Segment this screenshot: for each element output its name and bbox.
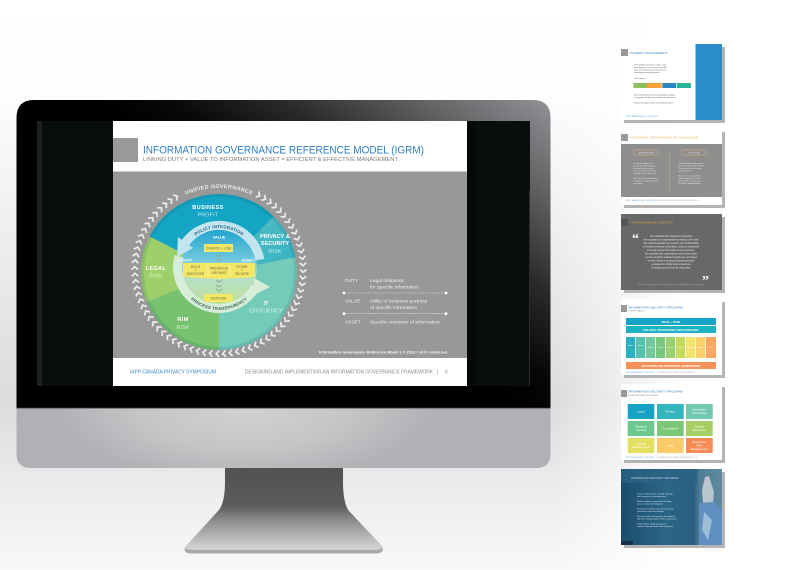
- thumbnail 5: program stakeholder grid: Physical: [636, 424, 647, 428]
- definition: value: of specific information: [370, 305, 418, 311]
- thumbnail 5: program stakeholder grid: DESIGNING AND IMPLEMENTING A FRAMEWORK | 8: [657, 456, 697, 459]
- thumbnail 1: incident management: INCIDENT MANAGEMENT: [630, 51, 668, 55]
- thumbnail 4: security program diagram: Comms: [648, 347, 653, 349]
- definition: value: [345, 298, 428, 311]
- thumbnail 5: program stakeholder grid: INFORMATION SECURITY PROGRAM: [628, 390, 684, 394]
- thumbnail 1: incident management: to respond to improve incident performance: [634, 96, 677, 99]
- thumbnail 5: program stakeholder grid: Privacy: [666, 410, 676, 414]
- box: hold, preserve, store: ARCHIVE: [211, 271, 227, 275]
- thumbnail 6: photo slide: Develop familiarity with latest security: [637, 508, 674, 510]
- thumbnail 1: incident management: Five stages:: [634, 77, 646, 80]
- thumbnail 5: program stakeholder grid: Resources: [692, 428, 707, 432]
- thumbnail 3: quotation: to foreign-based third party service providers.: [647, 249, 695, 252]
- thumbnail 1: incident management: [621, 44, 725, 123]
- definition: duty: [345, 278, 419, 290]
- monitor stand: [184, 466, 383, 554]
- footer right: |: [437, 370, 438, 376]
- thumbnail 2: outsourcing vs cloud: THE CLOUD: [688, 152, 700, 154]
- slide header marker: [113, 138, 138, 162]
- thumbnail 2: outsourcing vs cloud: its own processing plus: [633, 164, 657, 168]
- box: hold, preserve, store: HOLD: [191, 265, 201, 269]
- thumbnail 3: quotation: “: [632, 232, 639, 247]
- thumbnail 5: program stakeholder grid: Enterprise: [693, 440, 706, 444]
- thumbnail 3: quotation: is being processed by the third party.: [652, 266, 691, 270]
- thumbnail 2: outsourcing vs cloud: Client Shared usage only: [678, 162, 703, 165]
- thumbnail 2: outsourcing vs cloud: service where they have: [633, 170, 657, 172]
- lifecycle boxes: [183, 244, 255, 302]
- thumbnail 5: program stakeholder grid: Management: [691, 447, 708, 451]
- thumbnail 3: quotation: It is essential that organizations subscribed under: [645, 252, 697, 256]
- footer right: 6: [445, 370, 448, 376]
- box: hold, preserve, store: PRESERVE: [210, 266, 229, 270]
- thumbnail 5: program stakeholder grid: IAPP CANADA PRIVACY SYMPOSIUM: [626, 456, 655, 459]
- sector: IT: [219, 257, 297, 350]
- definition: duty: for specific information: [370, 284, 419, 290]
- definition: value: Utility or business purpose: [370, 298, 428, 304]
- thumbnail 6: photo slide: with the strategic goals of the corporation: [637, 518, 678, 520]
- thumbnail 3: quotation: to what results in protected transparent land: [648, 260, 695, 262]
- box: dispose: DISPOSE: [211, 296, 227, 300]
- label: privacy and security risk: RISK: [268, 249, 282, 255]
- thumbnail 2: outsourcing vs cloud: OUTSOURCING: [638, 152, 654, 154]
- thumbnail 5: program stakeholder grid: Human: [695, 424, 704, 428]
- labels: value, duty, asset: [182, 236, 255, 262]
- thumbnail 5: program stakeholder grid: Management: [633, 445, 650, 449]
- label: RIM risk: RIM: [177, 317, 189, 323]
- thumbnail 5: program stakeholder grid: Compliance: [663, 426, 678, 430]
- labels: value, duty, asset: DUTY: [182, 258, 193, 262]
- slide title: INFORMATION GOVERNANCE REFERENCE MODEL (IGRM): [143, 144, 424, 156]
- thumbnail 6: photo slide: monitor internal audits and regulators: [637, 525, 674, 528]
- label: legal risk: RISK: [149, 274, 163, 280]
- thumbnail 1: incident management: data and information response to: [634, 68, 667, 72]
- box: hold, preserve, store: DISCOVER: [187, 272, 205, 276]
- thumbnail 5: program stakeholder grid: ORGANIZATIONAL INVOLVEMENT: [628, 394, 659, 397]
- thumbnail 1: incident management: Follow through on the remediation plans: [634, 102, 674, 104]
- legend: definitions: [343, 278, 447, 326]
- thumbnail 4: security program diagram: Audit: [709, 346, 713, 349]
- thumbnail 3: quotation: equivalent to similar local protections: [651, 263, 691, 266]
- monitor screen: [37, 121, 530, 386]
- thumbnail 2: outsourcing vs cloud: DESIGNING AND IMPLEMENTING A FRAMEWORK | 4: [657, 199, 699, 202]
- box: hold, preserve, store: [183, 263, 255, 279]
- thumbnail 4: security program diagram: Physical: [668, 347, 674, 349]
- thumbnail 1: incident management: IAPP CANADA PRIVACY SYMPOSIUM: [626, 115, 658, 118]
- thumbnail 5: program stakeholder grid: [621, 384, 725, 463]
- thumbnail 6: photo slide: Monitor today's trends and activities: [637, 500, 673, 503]
- thumbnail 6: photo slide: Ensure levels of responses are aligned: [637, 515, 675, 518]
- thumbnail 2: outsourcing vs cloud: IAPP CANADA PRIVACY SYMPOSIUM: [626, 199, 658, 202]
- thumbnail 4: security program diagram: Systems: [678, 346, 684, 349]
- box: hold, preserve, store: +: [195, 268, 197, 272]
- thumbnail 5: program stakeholder grid: Technology: [692, 411, 707, 415]
- box: hold, preserve, store: +: [241, 268, 243, 272]
- thumbnail 6: photo slide: assess risks and mitigation: [637, 502, 664, 506]
- thumbnail 6: photo slide: Initiate filing, ongoing program: [637, 522, 666, 526]
- thumbnail 2: outsourcing vs cloud: and services in the Cloud?: [678, 164, 705, 168]
- thumbnail 5: program stakeholder grid: Audit: [667, 444, 674, 448]
- thumbnail 2: outsourcing vs cloud: The client usually remain: [633, 177, 658, 180]
- thumbnail 6: photo slide: INFORMATION SECURITY PROGRAM: [631, 476, 679, 480]
- thumbnail 2: outsourcing vs cloud: The client might use: [633, 162, 653, 165]
- labels: value, duty, asset: VALUE: [213, 236, 226, 240]
- box: hold, preserve, store: STORE: [236, 265, 249, 269]
- sector: legal: [141, 236, 219, 302]
- thumbnail 3: quotation: Source: Canadian privacy guidance on transfers for processing and third party service arrangements: [638, 283, 705, 286]
- label: unified governance: UNIFIED GOVERNANCE: [184, 184, 253, 195]
- thumbnail 1: incident management: compliance and protection: [634, 71, 660, 74]
- thumbnail 2: outsourcing vs cloud: The service at your own: [678, 167, 702, 170]
- definition: asset: ASSET: [345, 320, 361, 326]
- thumbnail 2: outsourcing vs cloud: cloud to drive: [678, 170, 692, 172]
- footer right: DESIGNING AND IMPLEMENTING AN INFORMATION GOVERNANCE FRAMEWORK: [245, 370, 434, 376]
- label: process transparency: PROCESS TRANSPARENCY: [190, 297, 246, 310]
- label: legal risk: [146, 266, 167, 280]
- thumbnail 3: quotation: THE CANADIAN CONTEXT: [631, 220, 673, 224]
- label: privacy and security risk: PRIVACY &: [260, 234, 290, 240]
- slide: IGRM: [113, 121, 467, 386]
- label: business profit: [192, 205, 224, 218]
- labels: value, duty, asset: ASSET: [242, 258, 255, 262]
- thumbnail 6: photo slide: processes and technologies: [637, 510, 665, 513]
- label: business profit: BUSINESS: [192, 205, 224, 211]
- thumbnail 4: security program diagram: Operate: [658, 346, 663, 349]
- thumbnail 5: program stakeholder grid: Legal: [637, 410, 645, 414]
- thumbnail 3: quotation: the importance of organizations working to the rules: [644, 238, 699, 242]
- label: RIM risk: [176, 317, 190, 331]
- label: IT efficiency: IT: [264, 301, 269, 307]
- label: RIM risk: RISK: [176, 325, 190, 331]
- thumbnail 4: security program diagram: ROLE + TONE: [662, 320, 680, 324]
- label: privacy and security risk: SECURITY: [261, 241, 289, 247]
- thumbnail 3: quotation: of sensitive personal information, which is transferred: [643, 246, 700, 248]
- divider: duty / value: [343, 292, 447, 294]
- thumbnail 2: outsourcing vs cloud: controls in procurement: [633, 172, 656, 175]
- outer chevron ring: [131, 191, 307, 357]
- thumbnail 4: security program diagram: DESIGNING AND IMPLEMENTING A FRAMEWORK | 7: [657, 371, 697, 374]
- thumbnail 4: security program diagram: POLICIES, PROCEDURES AND STANDARDS: [644, 328, 699, 332]
- thumbnail 4: security program diagram: IAPP CANADA PRIVACY SYMPOSIUM: [626, 371, 655, 374]
- label: policy integration: POLICY INTEGRATION: [194, 225, 244, 236]
- arrow: process transparency: [178, 256, 270, 308]
- thumbnail 4: security program diagram: INFORMATION SECURITY PROGRAM: [628, 306, 684, 310]
- label: privacy and security risk: [260, 234, 290, 255]
- model credit: Information Governance Reference Model | © 2012 / v3.0 / edrm.net: [319, 350, 448, 354]
- IGRM wheel diagram: [131, 184, 307, 358]
- definition: asset: [345, 320, 440, 326]
- thumbnail 3: quotation: The standard that measures recognizes: [650, 235, 693, 238]
- thumbnail 3: quotation: that would jeopardize the security and confidentiality: [643, 242, 699, 245]
- thumbnail 1: incident management: Recommend policy and standards updates: [634, 94, 676, 96]
- thumbnail 4: security program diagram: Access: [628, 344, 633, 347]
- slide subtitle: LINKING DUTY + VALUE TO INFORMATION ASSET = EFFICIENT & EFFECTIVE MANAGEMENT: [143, 157, 399, 163]
- thumbnail 2: outsourcing vs cloud: to retain records and they: [633, 180, 659, 182]
- footer left: IAPP CANADA PRIVACY SYMPOSIUM: [130, 370, 216, 376]
- thumbnail 5: program stakeholder grid: Information: [692, 408, 707, 412]
- arrow: policy integration: [177, 225, 260, 260]
- thumbnail 2: outsourcing vs cloud: There are usually more: [678, 174, 701, 178]
- sector: business: [150, 194, 274, 272]
- label: IT efficiency: [249, 301, 283, 314]
- thumbnail 5: program stakeholder grid: Risk: [696, 444, 703, 448]
- thumbnail 3: quotation: ”: [702, 274, 709, 289]
- sector: RIM: [147, 272, 219, 350]
- thumbnail 4: security program diagram: Assets: [638, 344, 643, 347]
- thumbnail 2: outsourcing vs cloud: which they can pay into: [678, 180, 702, 182]
- label: IT efficiency: EFFICIENCY: [249, 308, 283, 314]
- thumbnail 2: outsourcing vs cloud: [621, 129, 725, 208]
- thumbnail 1: incident management: management of a breach or public: [634, 66, 668, 69]
- definition: asset: Specific container of information: [370, 320, 440, 326]
- thumbnail 6: photo slide: [621, 469, 725, 548]
- thumbnail 1: incident management: The ability to provide and/or seek: [634, 64, 667, 66]
- thumbnail 2: outsourcing vs cloud: cloud partners to work: [678, 177, 700, 180]
- label: business profit: PROFIT: [198, 212, 219, 218]
- definition: value: VALUE: [345, 298, 361, 304]
- wheel rim: [142, 196, 296, 348]
- thumbnail 4: security program diagram: Incident: [698, 346, 704, 349]
- thumbnail 4: security program diagram: CONTROL BASICS: [628, 310, 645, 312]
- thumbnail 5: program stakeholder grid: Security: [636, 428, 647, 432]
- definition: duty: DUTY: [345, 278, 359, 284]
- label: legal risk: LEGAL: [146, 266, 167, 272]
- thumbnail 2: outsourcing vs cloud: on clients relationships: [678, 182, 701, 185]
- thumbnail 3: quotation: [621, 214, 725, 293]
- monitor chin: [16, 408, 550, 468]
- thumbnail 2: outsourcing vs cloud: the third party control: [633, 167, 654, 170]
- thumbnail 6: photo slide: Discuss information security strategy: [637, 492, 674, 496]
- sector: privacy and security: [219, 216, 296, 272]
- divider: value / asset: [343, 312, 447, 315]
- thumbnail 4: security program diagram: EDUCATION AND AWARENESS | REMEDIATION: [642, 364, 701, 368]
- thumbnail 2: outsourcing vs cloud: FUNCTIONAL OUTSOURCING VS. SAAS CLOUD: [630, 136, 698, 140]
- lifecycle chevrons: [216, 240, 222, 291]
- inner disc: [181, 229, 257, 305]
- definition: duty: Legal obligation: [370, 278, 405, 284]
- thumbnail 3: quotation: service providers outside Canada are contracted: [645, 256, 697, 259]
- thumbnail 2: outsourcing vs cloud: own them: [633, 182, 643, 185]
- thumbnail 5: program stakeholder grid: Change: [636, 442, 646, 446]
- thumbnail 6: photo slide: and response to management: [637, 495, 666, 498]
- thumbnail 4: security program diagram: Third party: [687, 346, 694, 349]
- monitor bezel: [16, 100, 550, 409]
- box: create + use: CREATE + USE: [206, 246, 232, 250]
- box: hold, preserve, store: SECURE: [235, 272, 250, 276]
- thumbnail 4: security program diagram: [621, 299, 725, 378]
